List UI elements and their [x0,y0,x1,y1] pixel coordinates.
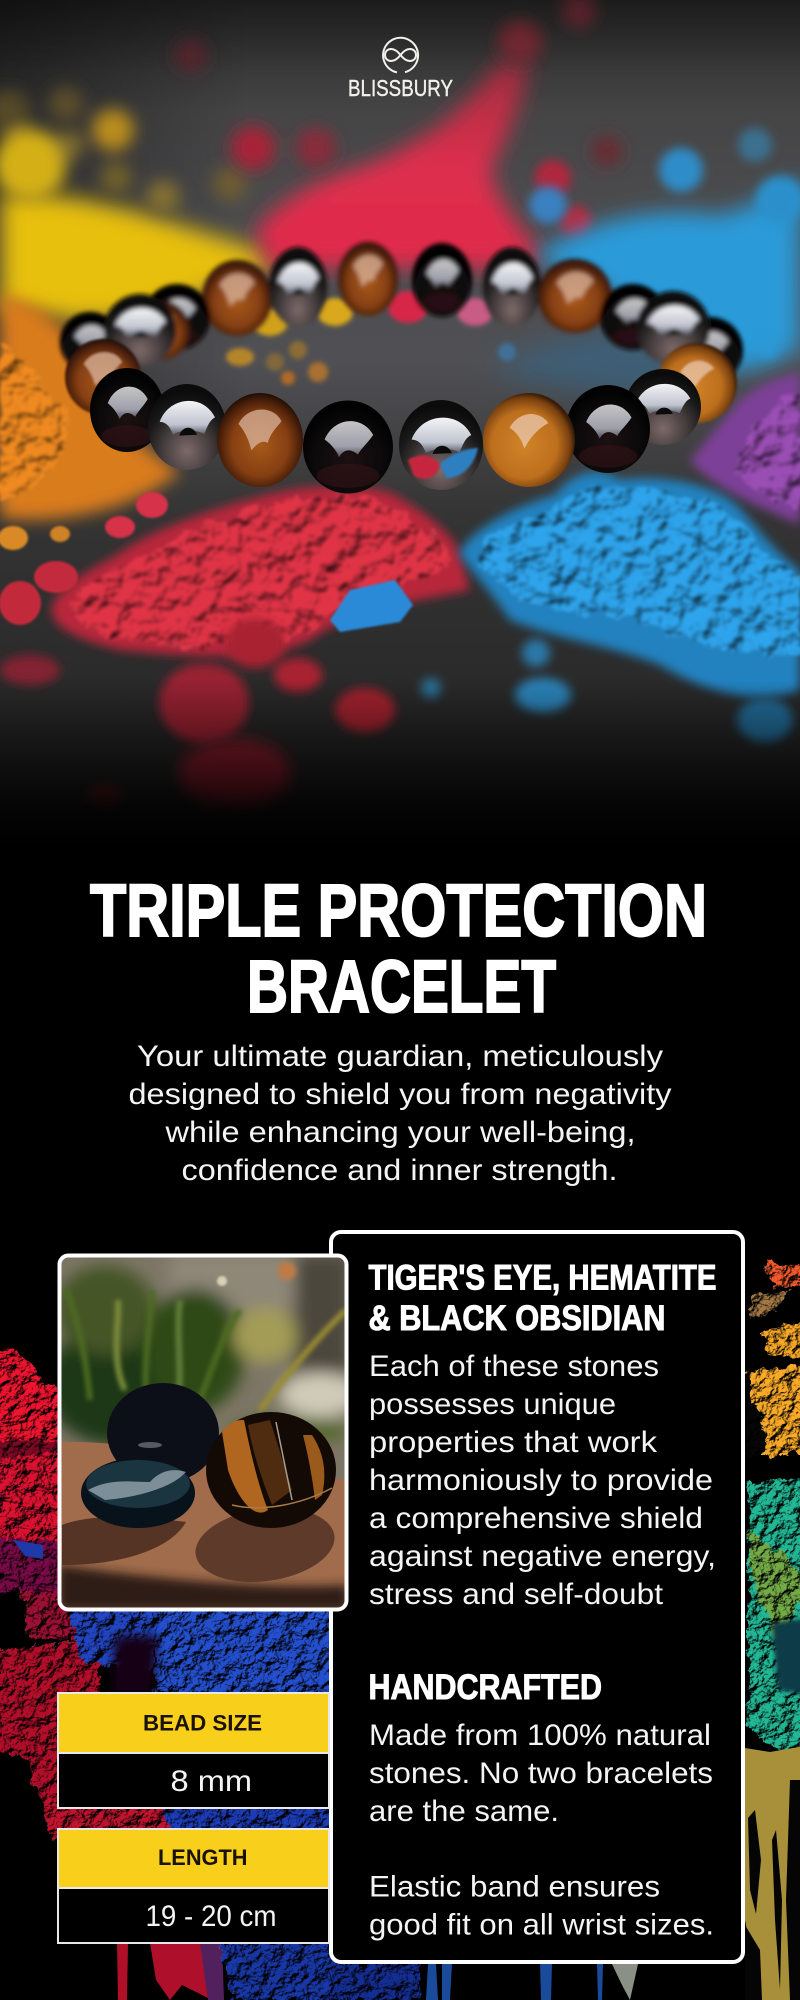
powder: blue cloud [490,128,800,400]
front beads [90,368,164,452]
powder: yellow [0,87,278,321]
intro paragraph: confidence and inner strength. [182,1154,618,1187]
text: stones description: Each of these stones [369,1350,659,1383]
intro paragraph: Your ultimate guardian, meticulously [137,1040,663,1073]
paint drips under the table [117,1943,638,2000]
powder: blue pile [330,472,800,742]
text: stones description [369,1350,716,1611]
powder: orange [0,295,180,520]
front blue-black stone [81,1458,195,1528]
heading: stones: TIGER'S EYE, HEMATITE [368,1258,716,1298]
text: handcrafted description: are the same. [369,1795,559,1828]
back beads (out of focus) [60,242,743,383]
text: stones description: stress and self-doubt [369,1578,664,1611]
spec table: bead size: BEAD SIZE [143,1710,262,1736]
powder: red cloud [174,0,622,268]
spec table: length: LENGTH [158,1845,248,1870]
spec table: length [58,1829,329,1943]
heading: handcrafted: HANDCRAFTED [368,1668,602,1707]
brand logo [348,38,453,101]
text: handcrafted description: stones. No two bracelets [369,1757,713,1790]
intro paragraph: while enhancing your well-being, [164,1116,636,1149]
text: stones description: properties that work [369,1426,658,1459]
tiger eye stone [206,1412,336,1528]
spec table: bead size: 8 mm [170,1765,252,1798]
text: stones description: against negative energy, [369,1540,716,1573]
text: stones description: harmoniously to provide [369,1464,713,1497]
spec table: bead size [58,1693,329,1808]
text: stones description: possesses unique [369,1388,616,1421]
small bokeh on the table inside the bracelet [226,291,516,385]
text: handcrafted description: good fit on all wrist sizes. [369,1908,714,1942]
photo: polished stones on a rock [45,1254,360,1611]
stone shadows [62,1517,186,1565]
info card [331,1232,743,1962]
bottom fade to black [0,680,800,860]
icon: infinity circle [383,38,418,72]
powder: orange crumbs [0,526,70,550]
spec table: length: 19 - 20 cm [146,1900,276,1933]
rock slab [58,1442,348,1611]
intro paragraph: designed to shield you from negativity [128,1078,672,1111]
heading: stones [368,1258,716,1338]
title [90,869,707,1028]
text: handcrafted description: Elastic band ensures [369,1870,660,1904]
text: stones description: a comprehensive shield [369,1502,703,1535]
decorative paint splash: right [745,1264,800,2000]
back obsidian stone [107,1383,219,1483]
gemstone bracelet [60,242,743,494]
title: BRACELET [247,945,556,1028]
text: handcrafted description: Made from 100% natural [369,1719,711,1752]
text: handcrafted description [369,1719,714,1942]
decorative paint splash: left and bottom [0,1348,638,2000]
powder: purple [690,373,800,525]
brand name: BLISSBURY [348,75,453,101]
heading: stones: & BLACK OBSIDIAN [368,1299,666,1338]
powder: red pile [0,486,470,807]
intro paragraph [128,1040,672,1187]
hero photo: bracelet and coloured powders [0,0,800,860]
